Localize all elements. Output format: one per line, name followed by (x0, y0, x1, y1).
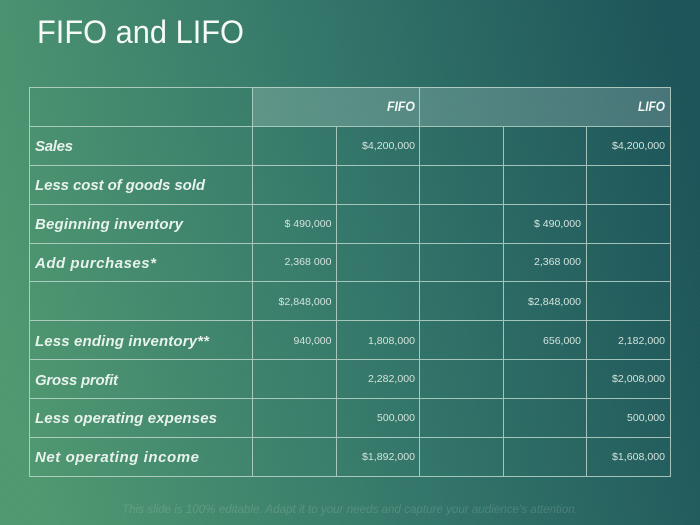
row: Sales (35, 138, 665, 155)
column header: LIFO: LIFO (638, 98, 665, 114)
row: Sales: $4,200,000 (612, 140, 665, 152)
footer note: This slide is 100% editable. Adapt it to your needs and capture your audience's attention. (122, 504, 578, 516)
row: Less operating expenses (35, 410, 665, 427)
row: Less ending inventory: 940,000 (294, 335, 332, 347)
table (30, 87, 670, 477)
row: Net operating income: Net operating income (35, 449, 199, 466)
row: Gross profit: 2,282,000 (368, 373, 415, 385)
row: Add purchases: 2,368 000 (284, 256, 332, 268)
row: Less ending inventory (35, 333, 665, 350)
row: Beginning inventory: $ 490,000 (534, 218, 581, 230)
row: Less operating expenses: 500,000 (627, 412, 665, 424)
row: Net operating income: $1,892,000 (362, 451, 415, 463)
row: Add purchases: Add purchases* (34, 255, 157, 272)
row: Gross profit: Gross profit (35, 372, 119, 389)
row: Net operating income (35, 449, 665, 466)
row: Less ending inventory: 1,808,000 (368, 335, 415, 347)
row: Beginning inventory: $ 490,000 (284, 218, 332, 230)
row: Less ending inventory: 2,182,000 (618, 335, 665, 347)
row: subtotal: $2,848,000 (278, 296, 332, 308)
column header: FIFO: FIFO (387, 98, 415, 114)
row: Less cost of goods sold: Less cost of goods sold (35, 177, 206, 194)
row: Less ending inventory: 656,000 (543, 335, 581, 347)
row: Sales: $4,200,000 (362, 140, 415, 152)
row: Add purchases (34, 255, 581, 272)
row: Less operating expenses: Less operating expenses (35, 410, 217, 427)
row: Less ending inventory: Less ending inventory** (35, 333, 210, 350)
row: subtotal (278, 296, 581, 308)
row: Gross profit: $2,008,000 (612, 373, 665, 385)
row: Beginning inventory (35, 216, 581, 233)
row: Gross profit (35, 372, 665, 389)
row: Net operating income: $1,608,000 (612, 451, 665, 463)
row: subtotal: $2,848,000 (528, 296, 581, 308)
row: Beginning inventory: Beginning inventory (35, 216, 184, 233)
row: Add purchases: 2,368 000 (534, 256, 581, 268)
row: Sales: Sales (35, 138, 73, 155)
row: Less operating expenses: 500,000 (377, 412, 415, 424)
title: FIFO and LIFO (37, 14, 244, 50)
header band (252, 87, 670, 126)
